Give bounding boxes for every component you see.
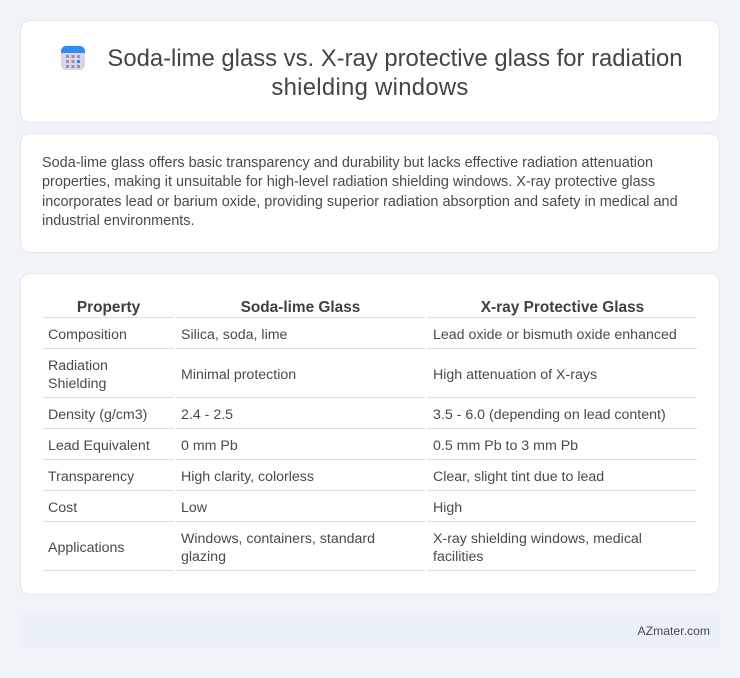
icon: calendar <box>61 46 85 70</box>
row: cost: Low <box>181 500 207 516</box>
row: transparency: Clear, slight tint due to lead <box>433 469 604 485</box>
row: lead equivalent: 0 mm Pb <box>181 438 238 454</box>
intro card <box>20 133 720 253</box>
row: lead equivalent: 0.5 mm Pb to 3 mm Pb <box>433 438 578 454</box>
row: density: 3.5 - 6.0 (depending on lead content) <box>433 407 666 423</box>
row: transparency <box>48 469 604 485</box>
title: Soda-lime glass vs. X-ray protective glass for radiation <box>107 45 683 72</box>
intro text: Soda-lime glass offers basic transparency and durability but lacks effective radiation attenuation <box>42 155 653 171</box>
row: cost: High <box>433 500 462 516</box>
footer brand: AZmater.com <box>638 624 710 638</box>
row: composition <box>48 327 677 343</box>
row: applications: X-ray shielding windows, medical <box>433 531 642 547</box>
row: radiation shielding: Minimal protection <box>181 367 296 383</box>
row: cost <box>48 500 462 516</box>
title <box>107 45 683 101</box>
intro text: properties, making it unsuitable for high-level radiation shielding windows. X-ray protective glass <box>42 174 655 190</box>
row: applications <box>48 531 642 565</box>
row: radiation shielding <box>48 358 597 392</box>
row: applications: Windows, containers, standard <box>181 531 375 547</box>
header card <box>20 20 720 123</box>
row: lead equivalent: Lead Equivalent <box>48 438 150 454</box>
row: radiation shielding: Radiation <box>48 358 108 374</box>
intro text <box>42 155 678 229</box>
row: transparency: High clarity, colorless <box>181 469 314 485</box>
table header: soda-lime glass: Soda-lime Glass <box>241 299 360 316</box>
table header: x-ray protective glass: X-ray Protective Glass <box>481 299 644 316</box>
row: density <box>48 407 666 423</box>
table header: property: Property <box>77 299 140 316</box>
table card <box>20 273 720 595</box>
comparison table <box>43 299 697 571</box>
footer bar <box>20 614 720 648</box>
row: composition: Silica, soda, lime <box>181 327 287 343</box>
row: composition: Lead oxide or bismuth oxide enhanced <box>433 327 677 343</box>
row: applications: glazing <box>181 549 226 565</box>
row: transparency: Transparency <box>48 469 134 485</box>
row: density: 2.4 - 2.5 <box>181 407 233 423</box>
intro text: incorporates lead or barium oxide, providing superior radiation absorption and safety in medical and <box>42 194 678 210</box>
row: radiation shielding: Shielding <box>48 376 106 392</box>
row: density: Density (g/cm3) <box>48 407 147 423</box>
row: cost: Cost <box>48 500 77 516</box>
title: shielding windows <box>271 74 469 101</box>
row: radiation shielding: High attenuation of X-rays <box>433 367 597 383</box>
row: applications: Applications <box>48 540 125 556</box>
row: composition: Composition <box>48 327 127 343</box>
row: lead equivalent <box>48 438 578 454</box>
intro text: industrial environments. <box>42 213 194 229</box>
row: applications: facilities <box>433 549 483 565</box>
